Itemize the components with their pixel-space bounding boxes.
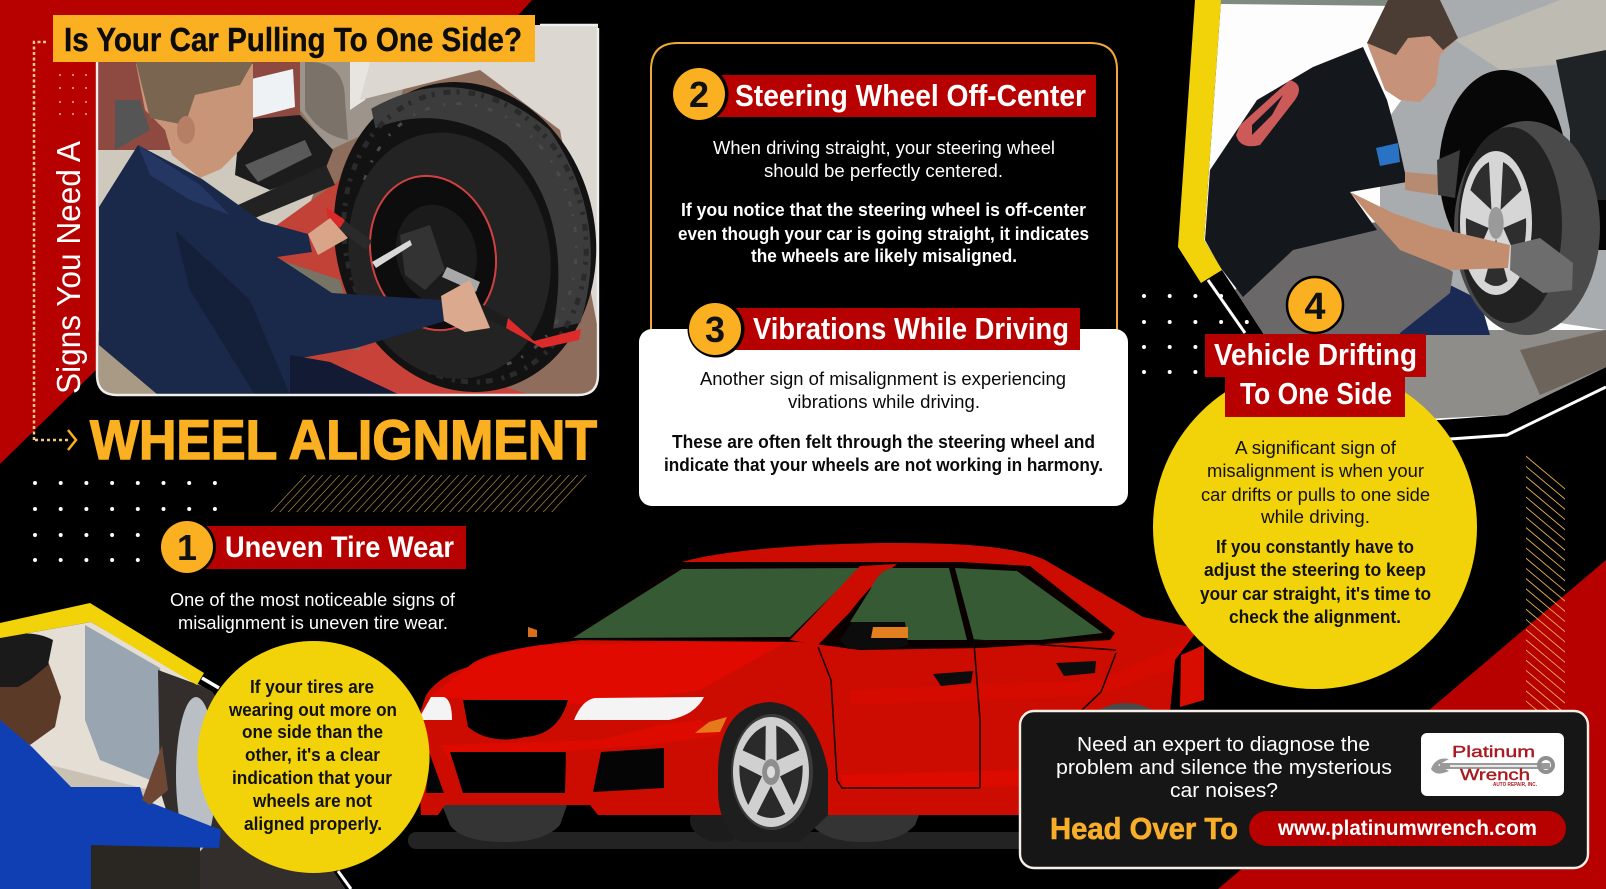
section 2 body text: should be perfectly centered. [764,160,1003,181]
section 4 body text: check the alignment. [1229,606,1401,627]
section 1 heading: Uneven Tire Wear [225,531,454,564]
section 4 heading [1205,277,1426,417]
ground shadow [408,832,1048,849]
call to action text: car noises? [1170,780,1278,802]
section 3 body text: These are often felt through the steering wheel and [672,431,1095,452]
shirt logo [1236,80,1299,146]
mechanic pants [1235,222,1453,334]
photo: mechanic at wheel [1178,0,1606,439]
background: red bottom-right shape [1218,560,1606,889]
head over to label: Head Over To [1050,811,1238,846]
yellow frame [0,603,204,685]
section 1 callout text: indication that your [232,767,392,788]
section 1 callout text: If your tires are [250,676,374,697]
dot grid left [35,483,216,560]
badge 1 [160,519,216,575]
section 3 heading: Vibrations While Driving [753,311,1069,346]
wheel clamp tools [339,220,372,246]
section 2 body text [678,137,1089,266]
red car illustration [408,543,1212,849]
gloves [1510,238,1573,293]
mechanic jacket [99,145,445,395]
window frame [568,562,1115,650]
main heading: WHEEL ALIGNMENT [90,408,597,471]
section 2 body text: even though your car is going straight, it indicates [678,223,1089,244]
section 3 heading [688,300,1080,358]
blue jacket [0,720,221,889]
head [136,64,253,178]
section 3 body text [664,368,1103,475]
section 4 heading: Vehicle Drifting [1214,337,1417,372]
section 2 panel outline [651,43,1117,330]
call to action text: Need an expert to diagnose the [1077,734,1370,756]
hands [308,218,348,255]
under-car tires [442,805,567,842]
section 4 body text [1200,437,1431,627]
section 3 panel [639,300,1128,506]
body highlights [430,640,790,705]
tire [334,82,596,392]
vertical dotted rule with arrow [34,42,76,450]
call to action text [1056,734,1392,802]
title banner: Is Your Car Pulling To One Side? [64,21,522,58]
section 2 body text: the wheels are likely misaligned. [751,245,1017,266]
rear wheel arch and tail [1097,703,1155,711]
photo: mechanic aligning wheel [97,25,625,417]
door handles [933,661,1096,686]
badge 2 [672,66,728,122]
logo: AUTO REPAIR, INC. [1493,782,1538,788]
section 1 callout text: aligned properly. [244,813,382,834]
background: red top-left shape [0,0,532,464]
section 2 body text: When driving straight, your steering wheel [713,137,1055,158]
section 4 body text: adjust the steering to keep [1204,559,1426,580]
section 2 heading: Steering Wheel Off-Center [735,78,1086,113]
rim [1460,151,1532,295]
section 4 body text: A significant sign of [1235,437,1397,458]
grilles [463,700,568,739]
tire [1454,121,1600,335]
mechanic head [0,662,61,745]
vertical label: Signs You Need A [50,141,87,394]
section 4 body text: If you constantly have to [1216,536,1414,557]
section 1 callout text: other, it's a clear [245,744,380,765]
website pill: www.platinumwrench.com [1277,817,1537,840]
badge 3: 3 [705,309,725,350]
section 4 body text: car drifts or pulls to one side [1201,484,1430,505]
website pill [1249,811,1566,846]
door lines [818,643,1116,788]
car body [416,543,1205,815]
white accent lines [1208,280,1606,439]
side windows [850,568,967,640]
hatch pattern right [1526,472,1565,730]
section 4 heading: To One Side [1240,376,1392,411]
turn signal [695,717,727,733]
floor [1260,330,1606,425]
section 1 callout text: one side than the [242,721,383,742]
badge 3 [688,300,744,358]
logo [1421,733,1564,796]
section 3 body text: vibrations while driving. [788,391,980,412]
section 3 body text: Another sign of misalignment is experiencing [700,368,1066,389]
section 1 heading [160,519,466,575]
call to action text: problem and silence the mysterious [1056,757,1392,779]
section 1 intro text: misalignment is uneven tire wear. [178,612,448,633]
section 3 body text: indicate that your wheels are not working in harmony. [664,454,1103,475]
badge 4: 4 [1304,286,1326,328]
section 4 body text: your car straight, it's time to [1200,583,1431,604]
call to action panel [1020,711,1588,868]
section 1 yellow circle [198,641,430,873]
section 2 heading [672,66,1096,122]
side mirror [840,622,908,649]
badge 4 [1287,277,1343,333]
photo: mechanic in blue jacket [0,603,351,889]
dot grid right [1144,296,1250,372]
section 1 callout text: wheels are not [252,790,372,811]
section 4 yellow circle [1153,365,1477,689]
dot grid in red [60,75,88,114]
arms [1350,192,1510,270]
A-pillar [790,564,897,645]
car body [1380,0,1606,330]
windshield [573,568,860,638]
section 1 callout text [228,676,397,834]
section 1 intro text [170,589,456,633]
section 4 body text: while driving. [1260,506,1370,527]
headlights [574,697,704,720]
yellow frame [1178,0,1222,283]
front wheel [718,702,828,842]
head [1367,0,1458,102]
logo: Platinum [1452,744,1535,761]
section 4 body text: misalignment is when your [1207,460,1424,481]
badge 2: 2 [689,74,709,115]
section 1 callout text: wearing out more on [228,699,397,720]
section 1 intro text: One of the most noticeable signs of [170,589,456,610]
logo: Wrench [1460,767,1530,784]
hatch pattern left [288,475,571,512]
mechanic shirt [1205,47,1407,297]
badge 1: 1 [177,527,197,568]
monitor [253,69,295,118]
shadow under car [1395,285,1490,335]
section 2 body text: If you notice that the steering wheel is off-center [681,199,1086,220]
